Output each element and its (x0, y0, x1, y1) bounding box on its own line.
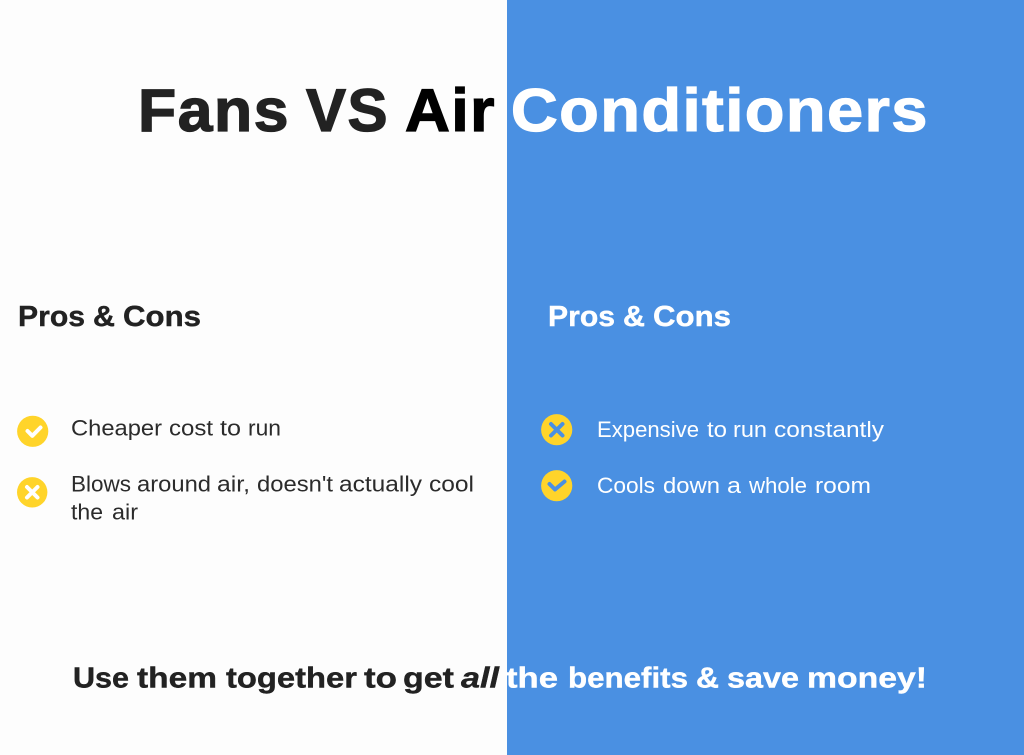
text: fans con: around (137, 472, 211, 496)
closing message: the (506, 662, 558, 694)
title: Conditioners (511, 77, 929, 144)
text: fans con: air, (217, 472, 250, 496)
panel: air conditioners background (507, 0, 1024, 755)
text: air conditioner con (597, 417, 885, 442)
text: fans pro: cost (169, 416, 214, 440)
text: fans con: cool (429, 472, 474, 496)
heading: fans pros and cons: Pros (18, 301, 85, 333)
icon: fans cross (17, 477, 47, 507)
text: fans con: the (71, 500, 103, 524)
text: air conditioner pro: room (815, 473, 871, 498)
closing message: Use (73, 662, 129, 694)
closing message: all (461, 662, 500, 694)
text: fans con (71, 472, 474, 524)
text: air conditioner con: constantly (774, 417, 885, 442)
closing message: save (727, 662, 799, 694)
text: air conditioner con: Expensive (597, 417, 699, 442)
closing message: together (226, 662, 357, 694)
text: air conditioner pro: Cools (597, 473, 655, 498)
closing message: & (696, 662, 719, 694)
text: air conditioner pro: a (727, 473, 742, 498)
title: Fans (138, 77, 290, 144)
text: air conditioner pro: down (663, 473, 720, 498)
text: fans con: actually (339, 472, 423, 496)
text: fans pro: to (220, 416, 241, 440)
text: fans con: air (112, 500, 139, 524)
title (138, 77, 929, 144)
text: air conditioner con: to (707, 417, 727, 442)
closing message: benefits (568, 662, 688, 694)
title: VS (306, 77, 389, 144)
heading: fans pros and cons: & (93, 301, 115, 333)
closing message: to (364, 662, 397, 694)
panel: fans background (0, 0, 507, 755)
icon: fans check (17, 416, 48, 447)
closing message: get (403, 662, 454, 694)
icon: air conditioner cross (541, 414, 572, 445)
heading: air conditioners pros and cons (548, 301, 731, 333)
text: fans pro (71, 416, 281, 440)
text: air conditioner pro (597, 473, 871, 498)
title: Air (405, 77, 496, 144)
heading: air conditioners pros and cons: Pros (548, 301, 615, 333)
text: fans con: Blows (71, 472, 131, 496)
heading: fans pros and cons (18, 301, 201, 333)
text: air conditioner pro: whole (748, 473, 807, 498)
text: air conditioner con: run (733, 417, 767, 442)
text: fans pro: run (248, 416, 281, 440)
heading: fans pros and cons: Cons (123, 301, 201, 333)
text: fans pro: Cheaper (71, 416, 163, 440)
icon: air conditioner check (541, 470, 572, 501)
text: fans con: doesn't (257, 472, 334, 496)
heading: air conditioners pros and cons: Cons (653, 301, 731, 333)
closing message (73, 662, 927, 694)
closing message: money! (807, 662, 927, 694)
heading: air conditioners pros and cons: & (623, 301, 645, 333)
closing message: them (137, 662, 217, 694)
